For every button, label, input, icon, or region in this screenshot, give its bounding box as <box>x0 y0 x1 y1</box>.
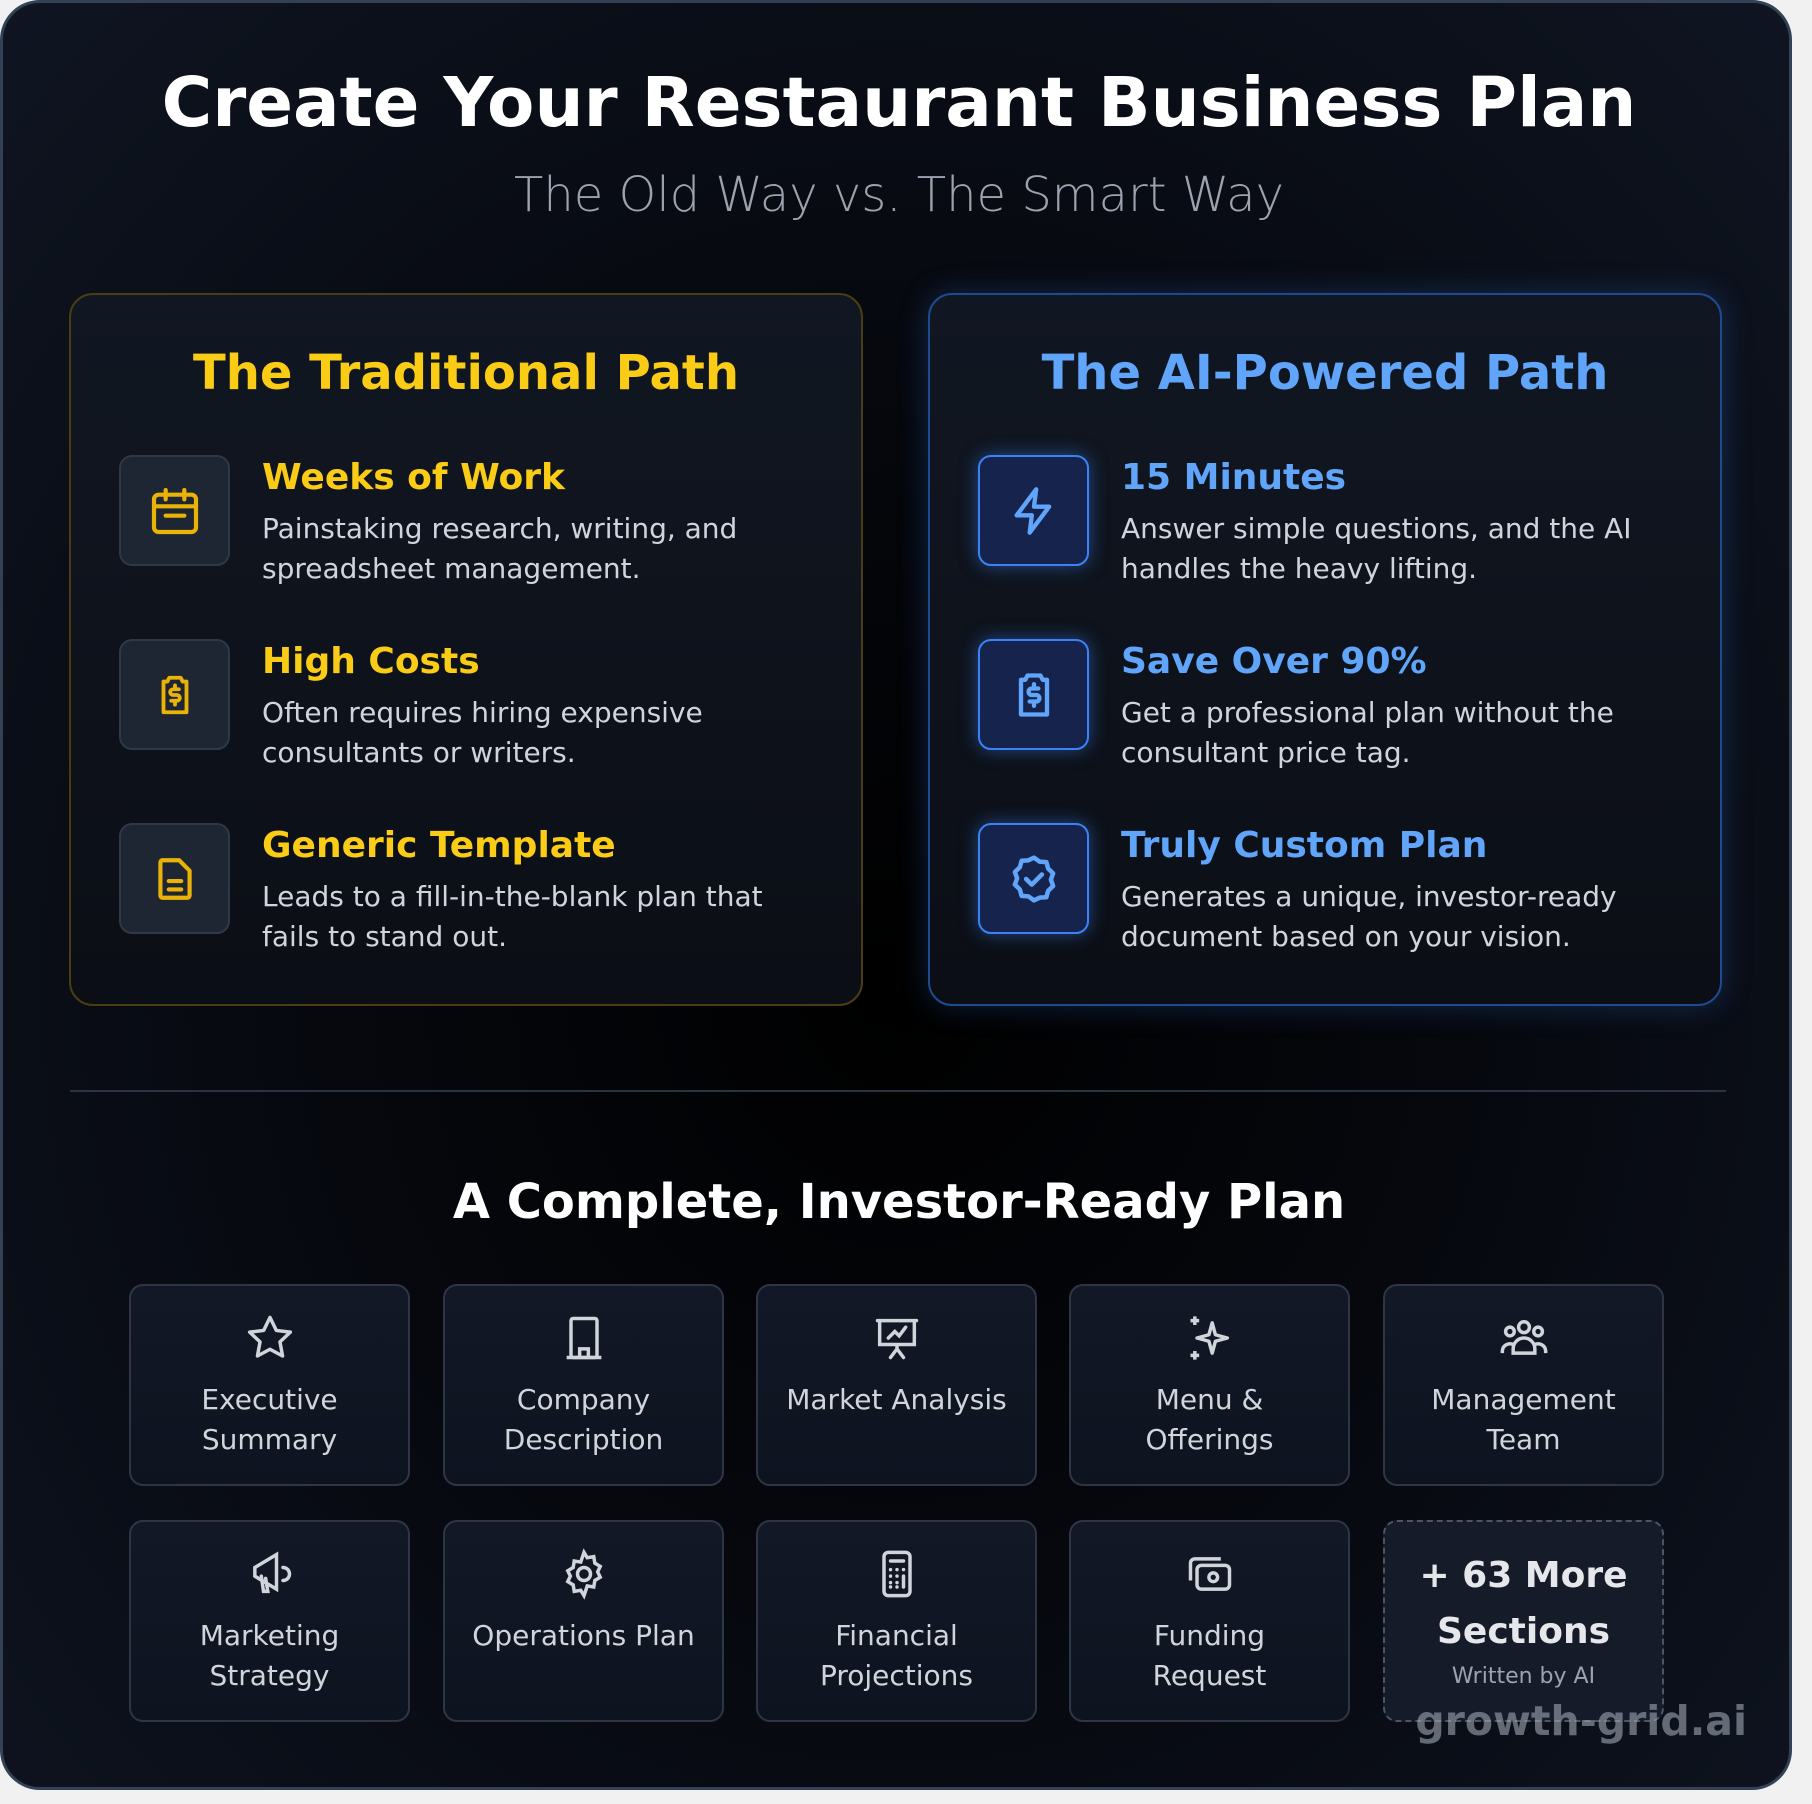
item: save over 90%: Save Over 90% <box>1121 641 1427 682</box>
tile: executive summary <box>129 1284 410 1486</box>
item: truly custom plan: Generates a unique, investor-ready <box>1121 880 1617 913</box>
item: weeks of work: spreadsheet management. <box>262 552 641 585</box>
panel: AI-powered path <box>928 293 1722 1006</box>
tile: menu & offerings: Menu & <box>1156 1383 1263 1416</box>
watermark: growth-grid.ai <box>1415 1697 1747 1745</box>
tile: management team: Team <box>1486 1423 1560 1456</box>
title: Create Your Restaurant Business Plan <box>162 63 1636 143</box>
tile: operations plan <box>443 1520 724 1722</box>
icon: document <box>119 823 230 934</box>
item: weeks of work: Weeks of Work <box>262 457 565 498</box>
tile: company description <box>443 1284 724 1486</box>
tile: executive summary: Summary <box>202 1423 337 1456</box>
icon: lightning <box>978 455 1089 566</box>
tile: financial projections <box>756 1520 1037 1722</box>
item: weeks of work <box>119 455 737 585</box>
item: truly custom plan <box>966 810 1617 953</box>
tile: more sections: Sections <box>1437 1611 1610 1652</box>
tile: market analysis: Market Analysis <box>786 1383 1007 1416</box>
tile: company description: Company <box>517 1383 650 1416</box>
tile: financial projections: Financial <box>835 1619 958 1652</box>
tile: funding request: Request <box>1153 1659 1266 1692</box>
tile: more sections <box>1383 1520 1664 1722</box>
item: save over 90%: consultant price tag. <box>1121 736 1411 769</box>
heading: AI: The AI-Powered Path <box>1042 345 1608 401</box>
grid of sections <box>129 1284 1664 1722</box>
subtitle: The Old Way vs. The Smart Way <box>514 167 1284 223</box>
item: 15 minutes <box>966 443 1632 585</box>
item: truly custom plan: document based on your vision. <box>1121 920 1571 953</box>
panel: traditional path <box>69 293 863 1006</box>
tile: menu & offerings <box>1069 1284 1350 1486</box>
tile: management team: Management <box>1431 1383 1616 1416</box>
heading: traditional: The Traditional Path <box>193 345 739 401</box>
item: generic template <box>119 823 763 953</box>
icon: calendar <box>119 455 230 566</box>
item: high costs: consultants or writers. <box>262 736 576 769</box>
item: generic template: Leads to a fill-in-the-blank plan that <box>262 880 763 913</box>
tile: marketing strategy: Marketing <box>200 1619 339 1652</box>
item: high costs <box>119 639 703 769</box>
tile: financial projections: Projections <box>820 1659 973 1692</box>
item: high costs: Often requires hiring expensive <box>262 696 703 729</box>
item: save over 90%: Get a professional plan without the <box>1121 696 1614 729</box>
section heading: A Complete, Investor-Ready Plan <box>453 1174 1345 1230</box>
tile: marketing strategy <box>129 1520 410 1722</box>
icon: dollar clipboard <box>978 639 1089 750</box>
tile: company description: Description <box>504 1423 663 1456</box>
item: high costs: High Costs <box>262 641 480 682</box>
tile: menu & offerings: Offerings <box>1146 1423 1273 1456</box>
tile: market analysis <box>756 1284 1037 1486</box>
icon: dollar clipboard <box>119 639 230 750</box>
item: truly custom plan: Truly Custom Plan <box>1121 825 1487 866</box>
tile: funding request: Funding <box>1154 1619 1265 1652</box>
tile: more sections: Written by AI <box>1452 1664 1595 1689</box>
tile: more sections: + 63 More <box>1419 1555 1628 1596</box>
item: weeks of work: Painstaking research, writing, and <box>262 512 737 545</box>
item: generic template: Generic Template <box>262 825 616 866</box>
item: 15 minutes: 15 Minutes <box>1121 457 1346 498</box>
icon: badge check <box>978 823 1089 934</box>
tile: marketing strategy: Strategy <box>210 1659 329 1692</box>
item: 15 minutes: handles the heavy lifting. <box>1121 552 1477 585</box>
tile: management team <box>1383 1284 1664 1486</box>
item: generic template: fails to stand out. <box>262 920 507 953</box>
tile: funding request <box>1069 1520 1350 1722</box>
item: 15 minutes: Answer simple questions, and the AI <box>1121 512 1632 545</box>
tile: operations plan: Operations Plan <box>472 1619 695 1652</box>
item: save over 90% <box>966 627 1614 769</box>
tile: executive summary: Executive <box>201 1383 338 1416</box>
